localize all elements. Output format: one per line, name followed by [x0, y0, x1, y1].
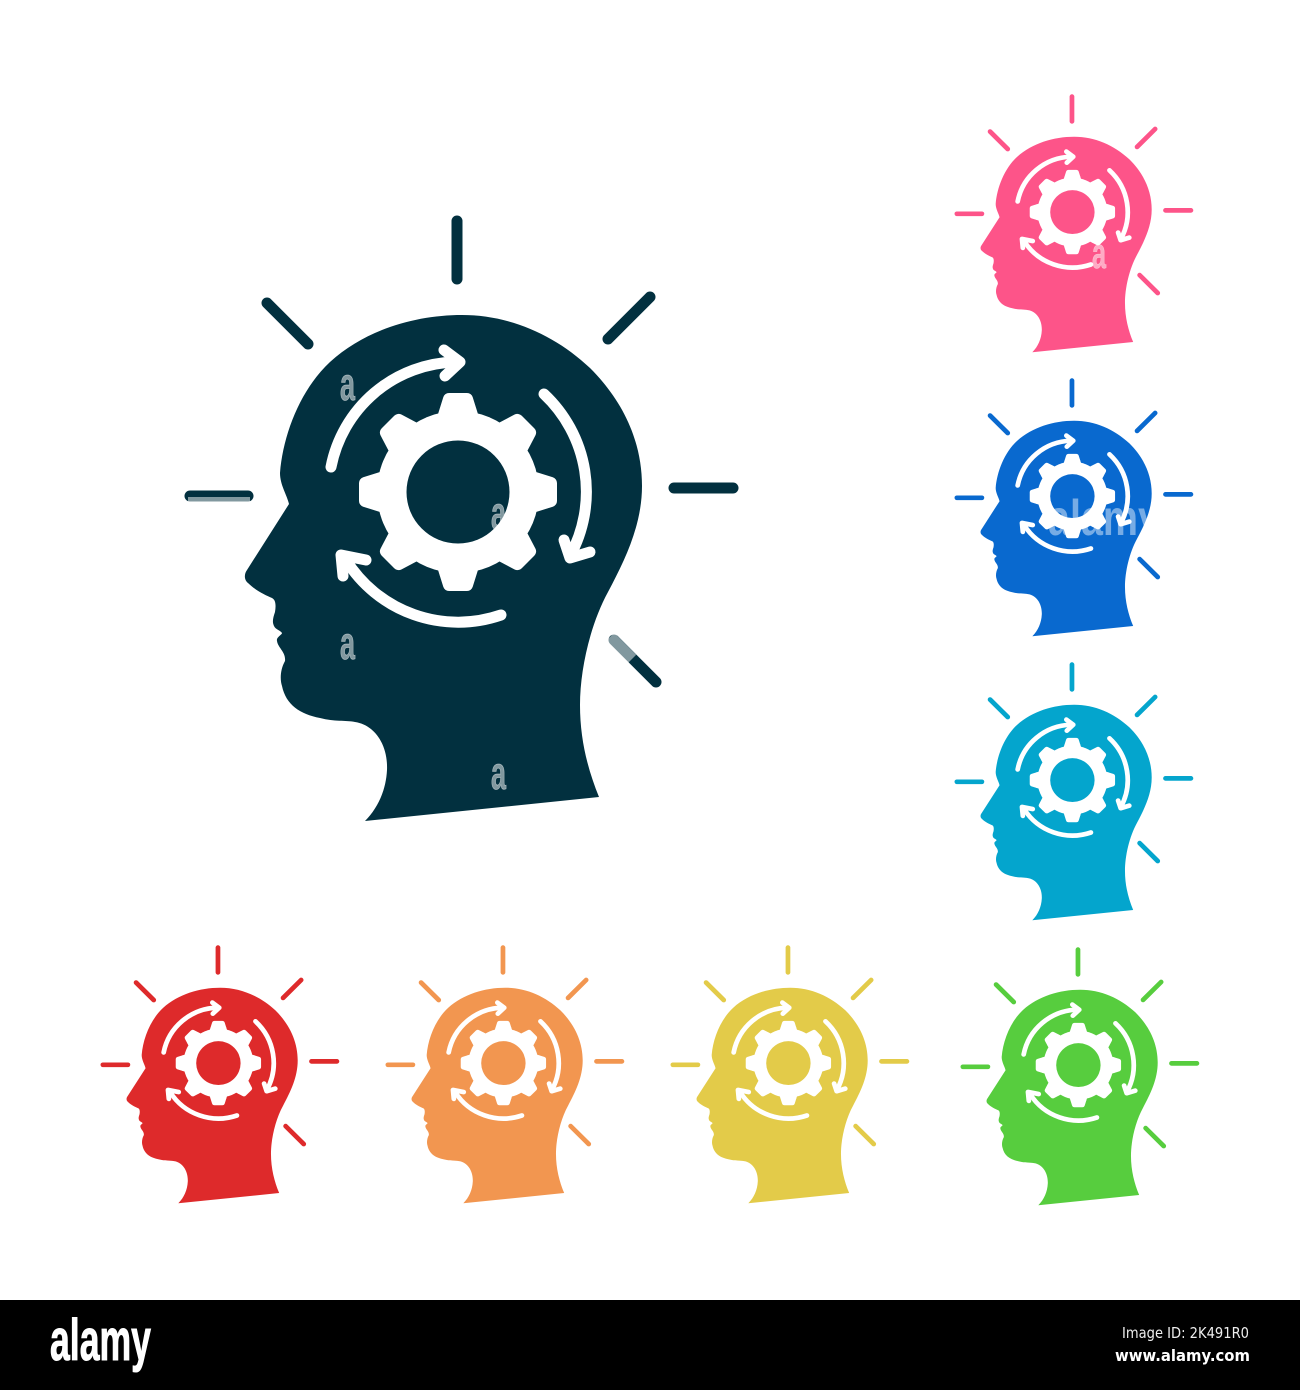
icon: light blue head — [957, 665, 1191, 920]
footer bar — [0, 1300, 1300, 1390]
watermark on pink head: a — [1092, 229, 1106, 278]
icon: yellow head — [673, 948, 907, 1203]
gear — [365, 399, 551, 585]
main icon: dark head with gear — [190, 221, 733, 821]
icon: red head — [103, 948, 337, 1203]
light rays — [190, 221, 733, 682]
icon: orange head — [388, 948, 622, 1203]
watermark letters on main head: a — [340, 617, 355, 669]
gear hole — [406, 440, 510, 544]
icon: green head — [963, 950, 1197, 1205]
watermark on blue head: alamy — [1048, 490, 1160, 546]
head silhouette — [245, 315, 642, 821]
icon: blue head — [957, 381, 1191, 636]
watermark letters on main head: a — [491, 487, 506, 539]
website: www.alamy.com — [1115, 1346, 1250, 1365]
icon: pink head — [957, 97, 1191, 352]
circular arrows — [331, 350, 590, 622]
watermark letters on main head: a — [491, 747, 506, 799]
image id: Image ID: 2K491R0 — [1122, 1324, 1249, 1342]
footer logo: alamy — [50, 1308, 151, 1373]
watermark letters on main head: a — [340, 358, 355, 410]
watermark fragments over rays — [188, 130, 998, 659]
watermark letters on main head — [340, 358, 506, 799]
